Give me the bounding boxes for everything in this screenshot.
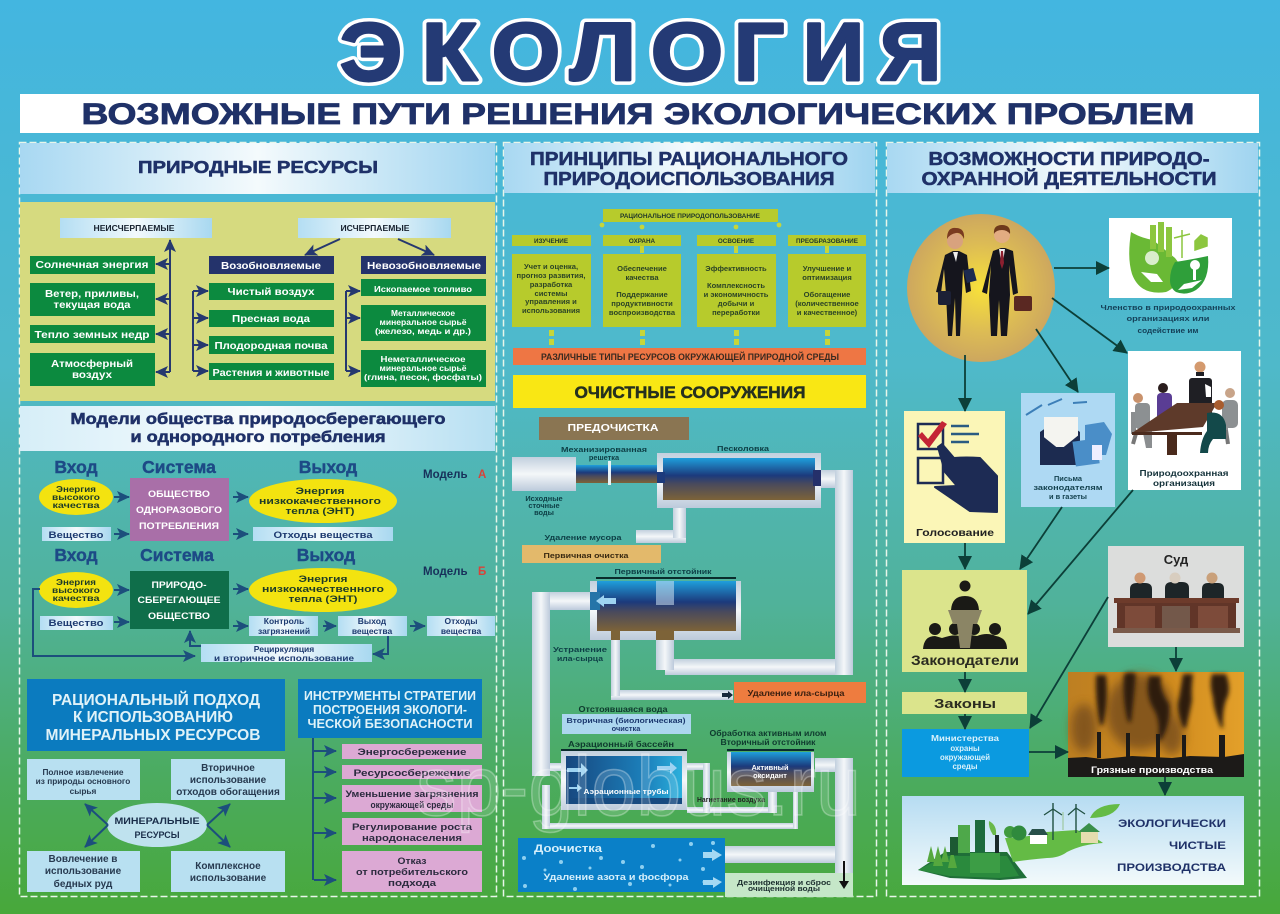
diagram: principles: ПРЕОБРАЗОВАНИЕ (796, 238, 858, 245)
label: sludge removal: Удаление ила-сырца (748, 688, 845, 698)
icon: court: Суд (1164, 552, 1189, 567)
diagram: treatment scheme (512, 417, 866, 897)
title: Я (880, 7, 941, 98)
diagram: principles: Эффективность (705, 264, 767, 273)
diagram: principles: Учет и оценка, (524, 262, 578, 271)
diagram: model A: Вещество (48, 530, 104, 541)
diagram: model B: ОБЩЕСТВО (148, 611, 210, 621)
diagram: model B: ПРИРОДО- (152, 580, 206, 590)
panel: ecological safety tools: подхода (388, 878, 437, 889)
diagram: model B: Контроль (264, 616, 304, 626)
label: ministries: окружающей (940, 753, 990, 762)
heading: treatment plants: ОЧИСТНЫЕ СООРУЖЕНИЯ (574, 383, 806, 402)
panel: clean production: ПРОИЗВОДСТВА (1117, 862, 1226, 874)
panel: right column (886, 142, 1260, 896)
diagram: model B: Энергия (56, 578, 96, 587)
icon: voting: Голосование (916, 527, 994, 539)
diagram: treatment scheme: Вторичный отстойник (720, 737, 816, 747)
diagram: treatment scheme: Первичная очистка (544, 551, 629, 560)
panel: resources classification: НЕИСЧЕРПАЕМЫЕ (94, 224, 175, 233)
diagram: principles: качества (625, 273, 659, 282)
diagram: principles (512, 209, 866, 365)
title: Л (570, 7, 636, 98)
label: disinfection (725, 861, 853, 897)
diagram: principles: переработки (712, 308, 760, 317)
heading: rational use principles: ПРИНЦИПЫ РАЦИОНАЛЬНОГО (530, 149, 848, 169)
title: О (651, 7, 723, 98)
panel: resources classification: (железо, медь и др.) (375, 326, 471, 336)
title: О (651, 7, 723, 98)
diagram: model B: вещества (441, 626, 481, 636)
diagram: treatment scheme: Удаление мусора (544, 533, 623, 542)
diagram: model B: Система (140, 545, 214, 565)
diagram: model B: СБЕРЕГАЮЩЕЕ (138, 595, 220, 605)
panel: ecological safety tools: Энергосбережение (358, 747, 466, 758)
diagram: principles: и качественное) (797, 308, 858, 317)
panel: mineral resources: К ИСПОЛЬЗОВАНИЮ (73, 709, 233, 726)
diagram: model B: и вторичное использование (214, 653, 354, 663)
diagram: model B: качества (52, 594, 100, 603)
diagram: model A: Выход (299, 457, 357, 477)
panel: mineral resources: бедных руд (54, 878, 113, 890)
panel: ecological safety tools: окружающей среды (370, 800, 454, 810)
diagram: principles: РАЗЛИЧНЫЕ ТИПЫ РЕСУРСОВ ОКРУЖАЮЩЕЙ ПРИРОДНОЙ СРЕДЫ (541, 351, 839, 362)
heading: environmental action: ОХРАННОЙ ДЕЯТЕЛЬНОСТИ (922, 168, 1216, 189)
diagram: treatment scheme: Первичный отстойник (614, 567, 712, 576)
diagram: model A: А (478, 469, 486, 481)
panel: resources classification: Солнечная энергия (36, 259, 148, 271)
label: membership: содействие им (1138, 326, 1199, 335)
diagram: model B (33, 545, 495, 663)
diagram: treatment scheme: оксидант (753, 771, 787, 780)
panel: resources classification: Ископаемое топливо (374, 284, 472, 294)
image: dirty production (1068, 672, 1244, 777)
diagram: principles: Улучшение и (803, 264, 852, 273)
panel: ecological safety tools: ИНСТРУМЕНТЫ СТРАТЕГИИ (304, 689, 476, 703)
title: Э (340, 7, 402, 98)
heading: rational use principles (504, 143, 875, 193)
watermark: sp-globus.ru (416, 739, 861, 833)
icon: court (1108, 546, 1244, 647)
diagram: model B: вещества (352, 626, 392, 636)
diagram: model B: Энергия (298, 574, 348, 585)
diagram: treatment scheme: Вторичная (биологическая) (566, 716, 686, 725)
diagram: treatment scheme: Исходные (525, 494, 563, 503)
title: К (422, 7, 478, 98)
diagram: model B: Вещество (48, 618, 104, 629)
panel: clean production: ЧИСТЫЕ (1169, 840, 1227, 852)
icon: green organisation (1109, 218, 1232, 298)
title: Э (340, 7, 402, 98)
panel: mineral resources: использование (190, 873, 267, 884)
label: membership: организациях или (1126, 314, 1210, 323)
panel: resources classification: текущая вода (54, 299, 131, 311)
panel: ecological safety tools: ПОСТРОЕНИЯ ЭКОЛОГИ- (313, 703, 467, 717)
label: pre-treatment (539, 417, 689, 440)
panel: resources classification: Растения и животные (212, 367, 330, 379)
diagram: model A: ОБЩЕСТВО (148, 489, 210, 499)
diagram: model B: Б (478, 566, 486, 578)
diagram: model A: Вход (54, 457, 98, 477)
diagram: principles: добычи и (718, 299, 755, 308)
title: О (492, 7, 560, 98)
diagram: treatment scheme: решетка (589, 453, 620, 462)
label: ministries (902, 729, 1029, 777)
diagram: model B: Рециркуляция (254, 644, 314, 654)
panel: post-treatment: Доочистка (534, 843, 603, 855)
diagram: model A: высокого (52, 493, 100, 502)
panel: ecological safety tools: Ресурсосбережение (354, 768, 470, 779)
panel: resources classification: Металлическое (391, 308, 455, 318)
diagram: model A: ОДНОРАЗОВОГО (136, 505, 222, 515)
diagram: principles: ОСВОЕНИЕ (718, 238, 754, 245)
icon: legislators (902, 570, 1027, 672)
panel: ecological safety tools: Регулирование роста (352, 822, 473, 833)
icon: voting (904, 411, 1005, 543)
diagram: principles: Поддержание (616, 290, 668, 299)
icon: legislators: Законодатели (911, 653, 1019, 668)
diagram: treatment scheme: ила-сырца (557, 654, 604, 663)
diagram: treatment scheme: Аэрационный бассейн (568, 739, 674, 749)
title (340, 7, 941, 98)
heading: treatment plants (513, 375, 866, 408)
panel: ecological safety tools: Уменьшение загрязнения (346, 789, 478, 799)
diagram: treatment scheme: Аэрационные трубы (584, 787, 668, 796)
panel: resources classification: воздух (72, 369, 112, 381)
icon: citizens circle (907, 214, 1055, 362)
panel: mineral resources: Вторичное (201, 763, 255, 774)
diagram: principles: (количественное (795, 299, 859, 308)
title: Г (734, 7, 784, 98)
diagram: treatment scheme: воды (534, 508, 554, 517)
icon: environmental organisation: организация (1153, 479, 1215, 488)
image: dirty production: Грязные производства (1091, 765, 1214, 775)
panel: mineral resources: МИНЕРАЛЬНЫХ РЕСУРСОВ (46, 727, 260, 744)
diagram: principles: использования (522, 306, 580, 315)
diagram: model A: качества (52, 501, 100, 510)
panel: mineral resources: Вовлечение в (49, 854, 117, 865)
panel: ecological safety tools: народонаселения (362, 833, 462, 844)
diagram: treatment scheme: Механизированная (561, 445, 647, 454)
panel: mineral resources: сырья (70, 786, 97, 796)
diagram: model B: тепла (ЭНТ) (288, 594, 358, 605)
label: membership: Членство в природоохранных (1100, 303, 1236, 312)
label: sludge removal (722, 682, 866, 703)
diagram: treatment scheme: Активный (751, 763, 789, 772)
diagram: model B: высокого (52, 586, 100, 595)
diagram: principles: РАЦИОНАЛЬНОЕ ПРИРОДОПОЛЬЗОВАНИЕ (620, 213, 761, 220)
icon: letters: Письма (1054, 474, 1083, 483)
diagram: treatment scheme: Нагнетание воздуха (697, 797, 765, 804)
panel: mineral resources (27, 679, 285, 892)
heading: society models (20, 406, 495, 451)
label: laws (902, 692, 1027, 714)
panel: resources classification: Пресная вода (232, 313, 310, 325)
title: И (803, 7, 864, 98)
subtitle band (20, 94, 1259, 133)
panel: mineral resources: Комплексное (195, 861, 261, 872)
title: Г (734, 7, 784, 98)
diagram: treatment scheme: сточные (528, 501, 560, 510)
label: pre-treatment: ПРЕДОЧИСТКА (568, 422, 659, 434)
diagram: model B: Выход (358, 616, 387, 626)
panel: mineral resources: отходов обогащения (176, 786, 280, 798)
panel: resources classification: минеральное сырьё (380, 317, 467, 327)
label: disinfection: Дезинфекция и сброс (737, 878, 831, 887)
panel: ecological safety tools: от потребительского (356, 867, 468, 878)
title: Я (880, 7, 941, 98)
diagram: model A: ПОТРЕБЛЕНИЯ (139, 521, 219, 531)
diagram: principles: ИЗУЧЕНИЕ (534, 238, 568, 245)
label: laws: Законы (934, 696, 996, 711)
diagram: model A: Энергия (296, 486, 344, 497)
heading: environmental action (887, 143, 1258, 193)
diagram: model B: Модель (423, 566, 468, 578)
panel: ecological safety tools: ЧЕСКОЙ БЕЗОПАСНОСТИ (308, 716, 473, 731)
label: ministries: охраны (950, 744, 980, 753)
diagram: model A: тепла (ЭНТ) (286, 506, 354, 517)
panel: post-treatment (518, 838, 725, 892)
heading: natural resources: ПРИРОДНЫЕ РЕСУРСЫ (138, 157, 378, 177)
diagram: principles: прогноз развития, (516, 271, 586, 280)
panel: resources classification: Атмосферный (51, 358, 133, 370)
icon: letters (1021, 393, 1115, 507)
diagram: principles: воспроизводства (609, 308, 676, 317)
panel: mineral resources: из природы основного (36, 776, 130, 786)
diagram: model A: Модель (423, 469, 468, 481)
panel: mineral resources: РЕСУРСЫ (134, 830, 180, 840)
heading: society models: Модели общества природосберегающего (70, 411, 446, 428)
panel: resources classification: (глина, песок, фосфаты) (364, 372, 482, 382)
panel: mineral resources: РАЦИОНАЛЬНЫЙ ПОДХОД (52, 691, 260, 709)
diagram: model A: низкокачественного (259, 496, 381, 507)
label: ministries: Министерства (931, 734, 1000, 743)
diagram: model B: Вход (54, 545, 98, 565)
icon: letters: и в газеты (1049, 492, 1087, 501)
panel: resources classification: Чистый воздух (228, 286, 315, 298)
panel: mineral resources: использование (190, 775, 267, 786)
diagram: principles: управления и (525, 297, 577, 306)
heading: rational use principles: ПРИРОДОИСПОЛЬЗОВАНИЯ (544, 169, 834, 189)
diagram: treatment scheme: Песколовка (717, 444, 770, 453)
panel: clean production: ЭКОЛОГИЧЕСКИ (1118, 818, 1226, 830)
diagram: principles: Комплексность (707, 281, 765, 290)
title: К (422, 7, 478, 98)
diagram: model B: низкокачественного (262, 584, 384, 595)
icon: environmental organisation: Природоохранная (1140, 469, 1229, 478)
flow arrows (965, 268, 1176, 795)
diagram: principles: Обеспечение (617, 264, 667, 273)
title: И (803, 7, 864, 98)
icon: letters: законодателям (1034, 483, 1102, 492)
panel: resources classification: минеральное сырьё (380, 363, 467, 373)
panel: resources classification: Возобновляемые (221, 260, 321, 272)
label: ministries: среды (952, 762, 978, 771)
panel: mineral resources: Полное извлечение (42, 767, 124, 777)
diagram: treatment scheme: Обработка активным илом (710, 728, 826, 738)
heading: society models: и однородного потребления (130, 429, 386, 446)
diagram: principles: разработка (530, 280, 573, 289)
panel: resources classification: Плодородная почва (214, 340, 328, 352)
panel: clean production (902, 796, 1244, 885)
diagram: model A: Отходы вещества (274, 530, 373, 541)
panel: ecological safety tools (298, 679, 482, 892)
title: Л (570, 7, 636, 98)
diagram: principles: Обогащение (804, 290, 850, 299)
panel: resources classification: Невозобновляемые (367, 260, 481, 272)
diagram: principles: продуктивности (611, 299, 673, 308)
title: О (492, 7, 560, 98)
diagram: treatment scheme: Отстоявшаяся вода (578, 704, 668, 714)
panel: mineral resources: использование (45, 866, 122, 877)
label: membership (1100, 303, 1236, 335)
diagram: principles: ОХРАНА (629, 238, 656, 245)
icon: environmental organisation (1128, 351, 1241, 490)
subtitle band: ВОЗМОЖНЫЕ ПУТИ РЕШЕНИЯ ЭКОЛОГИЧЕСКИХ ПРОБЛЕМ (82, 98, 1194, 131)
diagram: principles: оптимизация (802, 273, 852, 282)
diagram: model B: загрязнений (258, 626, 310, 636)
panel: ecological safety tools: Отказ (398, 856, 427, 867)
label: disinfection: очищенной воды (748, 884, 820, 893)
diagram: model B: Отходы (444, 616, 478, 626)
diagram: model A (39, 457, 486, 541)
heading: environmental action: ВОЗМОЖНОСТИ ПРИРОДО- (928, 149, 1210, 169)
diagram: model B: Выход (297, 545, 355, 565)
diagram: treatment scheme: очистка (612, 724, 641, 733)
heading: natural resources (20, 143, 495, 194)
diagram: model A: Система (142, 457, 216, 477)
panel: resources classification: Тепло земных недр (34, 329, 150, 341)
panel: mineral resources: МИНЕРАЛЬНЫЕ (114, 816, 200, 826)
panel: resources classification: ИСЧЕРПАЕМЫЕ (340, 224, 410, 233)
panel: left column (20, 142, 496, 896)
diagram: model A: Энергия (56, 485, 96, 494)
diagram: principles: системы (534, 289, 568, 298)
panel: resources classification: Ветер, приливы, (45, 288, 139, 300)
panel: resources classification: Неметаллическое (380, 354, 466, 364)
diagram: principles: и экономичность (704, 290, 769, 299)
panel: resources classification (20, 202, 495, 401)
panel: post-treatment: Удаление азота и фосфора (544, 872, 690, 882)
diagram: treatment scheme: Устранение (553, 645, 607, 654)
panel: middle column (504, 142, 876, 897)
